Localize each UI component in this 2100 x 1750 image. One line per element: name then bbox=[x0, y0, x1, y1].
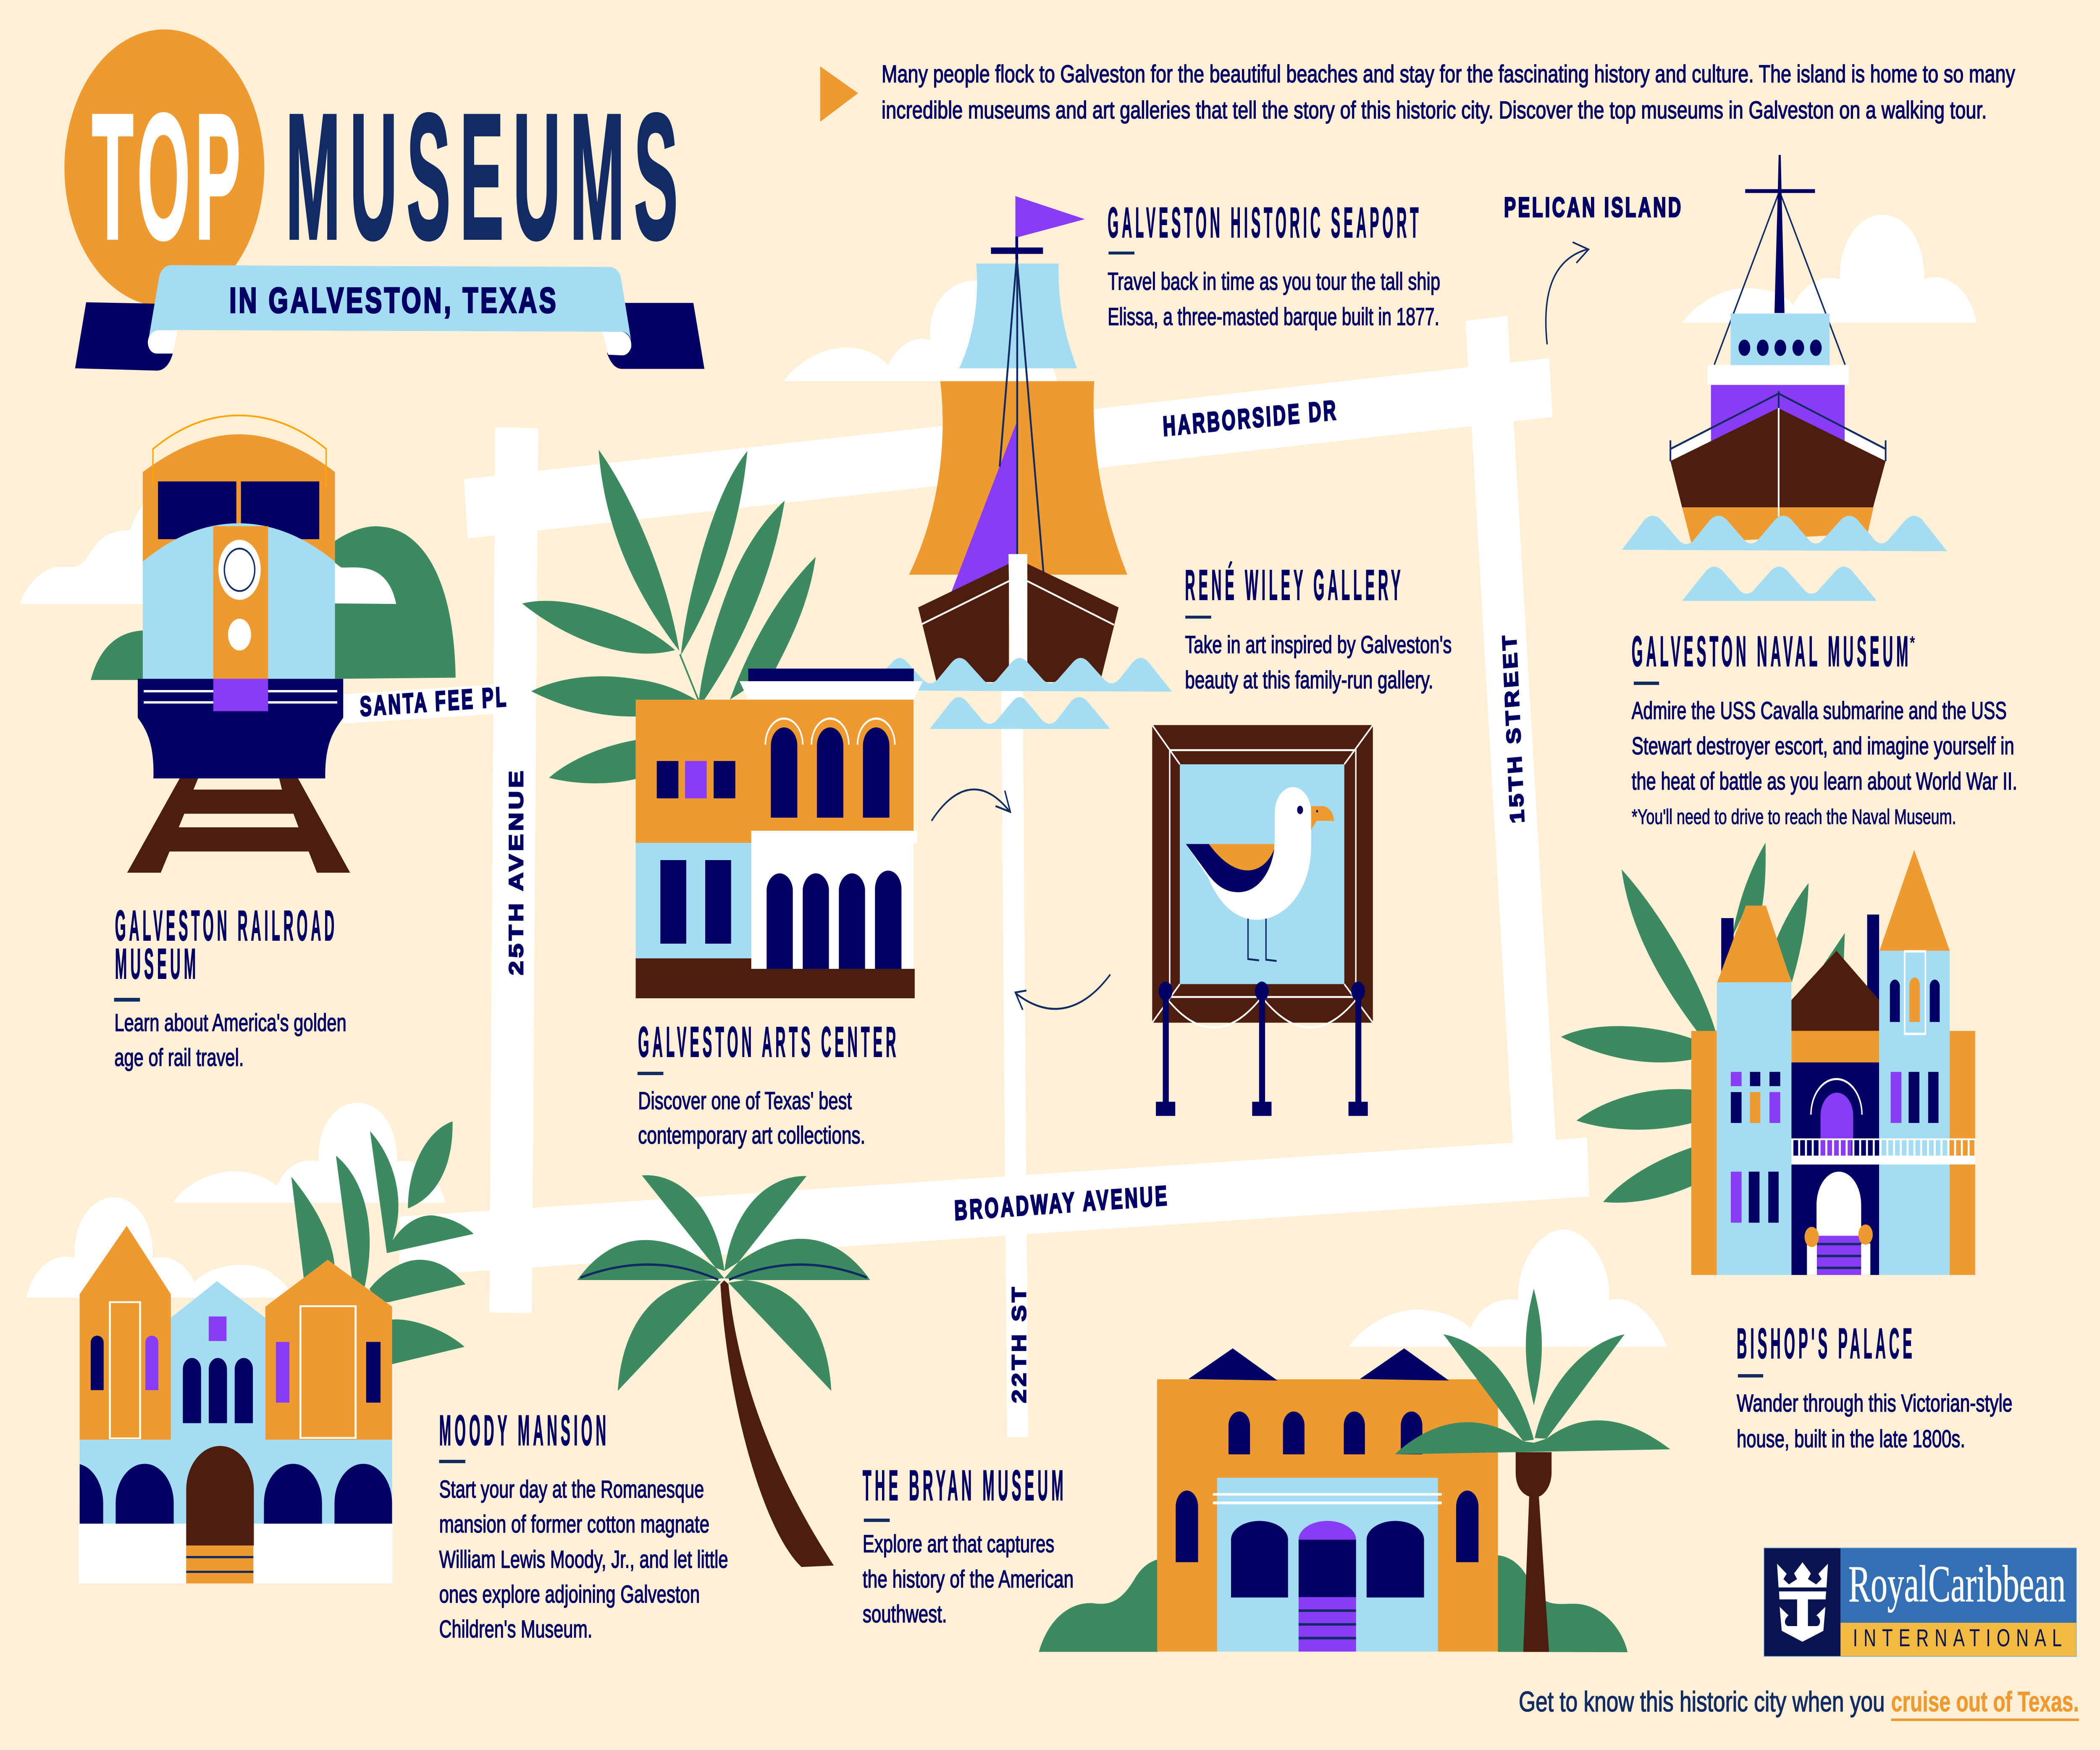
text block: Galveston Arts Center bbox=[638, 1018, 899, 1149]
description line 2: mansion of former cotton magnate bbox=[439, 1510, 709, 1538]
description: Admire the USS Cavalla submarine and the USS bbox=[1632, 697, 2007, 724]
description line 2: age of rail travel. bbox=[114, 1044, 244, 1071]
illustration: Bishop's Palace bbox=[1561, 843, 1975, 1275]
title word: MUSEUMS: MUSEUMS bbox=[286, 76, 687, 277]
description line 5: Children's Museum. bbox=[439, 1615, 592, 1643]
orange sun circle bbox=[64, 29, 264, 307]
title word: TOP: TOP bbox=[92, 76, 245, 277]
road label: Broadway Avenue: BROADWAY AVENUE bbox=[954, 1180, 1170, 1226]
rule bbox=[1185, 616, 1211, 619]
logo wordmark: RoyalCaribbean bbox=[1848, 1556, 2066, 1613]
rule bbox=[1634, 682, 1659, 685]
description: Discover one of Texas' best bbox=[638, 1087, 852, 1115]
description line 4: ones explore adjoining Galveston bbox=[439, 1580, 700, 1608]
text block: The Bryan Museum bbox=[863, 1461, 1074, 1628]
description line 2: Stewart destroyer escort, and imagine yourself in bbox=[1632, 732, 2014, 760]
text: GALVESTON HISTORIC SEAPORT bbox=[1108, 199, 1422, 247]
description: Learn about America's golden bbox=[114, 1009, 346, 1036]
text block: René Wiley Gallery bbox=[1185, 561, 1452, 694]
ribbon subtitle: IN GALVESTON, TEXAS bbox=[229, 281, 558, 320]
text: GALVESTON RAILROAD bbox=[115, 902, 338, 950]
description line 2: the history of the American bbox=[863, 1565, 1074, 1593]
intro line 2: incredible museums and art galleries that tell the story of this historic city. Discover the top museums in Galveston on a walking tour. bbox=[882, 96, 1987, 124]
description line 2: Elissa, a three-masted barque built in 1877. bbox=[1108, 303, 1439, 331]
intro line 1: Many people flock to Galveston for the beautiful beaches and stay for the fascinating history and culture. The island is home to so many bbox=[882, 60, 2016, 88]
link underline bbox=[1891, 1719, 2079, 1721]
description: Explore art that captures bbox=[863, 1530, 1054, 1558]
arrow: to Pelican Island bbox=[1546, 242, 1588, 344]
title block bbox=[64, 29, 704, 371]
illustration: leaning palm tree bbox=[577, 1175, 870, 1567]
intro paragraph bbox=[820, 60, 2016, 124]
logo: Royal Caribbean International bbox=[1764, 1548, 2077, 1657]
description: Wander through this Victorian-style bbox=[1737, 1389, 2012, 1417]
text block: Galveston Historic Seaport bbox=[1108, 199, 1440, 331]
description: Take in art inspired by Galveston's bbox=[1185, 631, 1452, 659]
picture frame bbox=[1152, 725, 1373, 1116]
text block: Galveston Naval Museum bbox=[1632, 627, 2017, 829]
illustration: René Wiley Gallery framed seagull bbox=[932, 725, 1373, 1116]
call to action text: Get to know this historic city when you bbox=[1519, 1685, 1885, 1718]
rule bbox=[439, 1460, 465, 1463]
text: THE BRYAN MUSEUM bbox=[863, 1461, 1067, 1509]
rule bbox=[864, 1519, 890, 1522]
road label: 15th Street: 15TH STREET bbox=[1498, 632, 1529, 824]
logo tagline: INTERNATIONAL bbox=[1853, 1624, 2073, 1652]
description line 2: contemporary art collections. bbox=[638, 1121, 865, 1149]
illustration: Moody Mansion bbox=[26, 1102, 474, 1583]
illustration: Naval Museum ship bbox=[1546, 155, 1976, 601]
ribbon banner bbox=[75, 265, 704, 371]
rule bbox=[638, 1072, 663, 1075]
text block: Galveston Railroad Museum: MUSEUM bbox=[115, 940, 199, 988]
icon: orange arrow bbox=[820, 66, 858, 122]
rule bbox=[1108, 252, 1134, 254]
road label: Harborside Dr: HARBORSIDE DR bbox=[1162, 395, 1339, 442]
description line 3: southwest. bbox=[863, 1600, 947, 1628]
text: GALVESTON ARTS CENTER bbox=[638, 1018, 899, 1066]
description: Travel back in time as you tour the tall ship bbox=[1108, 268, 1440, 295]
description line 2: house, built in the late 1800s. bbox=[1737, 1425, 1965, 1453]
asterisk: * bbox=[1910, 632, 1915, 653]
call to action bbox=[1519, 1685, 2079, 1721]
illustration: tall ship at Historic Seaport bbox=[784, 196, 1172, 729]
road label: 25th Avenue: 25TH AVENUE bbox=[505, 768, 528, 975]
arrow: to gallery bbox=[932, 790, 1010, 821]
illustration: palm leaves and Galveston Arts Center building bbox=[522, 450, 923, 998]
rule bbox=[114, 998, 140, 1002]
illustration: The Bryan Museum building bbox=[1039, 1230, 1670, 1652]
call to action link: cruise out of Texas. bbox=[1891, 1685, 2079, 1718]
text block: Galveston Railroad Museum bbox=[114, 902, 346, 1071]
illustration: Galveston Railroad Museum train bbox=[20, 415, 456, 873]
street map roads bbox=[343, 316, 1589, 1437]
text block: René Wiley Gallery: RENÉ WILEY GALLERY bbox=[1185, 561, 1404, 609]
description line 2: beauty at this family-run gallery. bbox=[1185, 666, 1433, 694]
road labels bbox=[360, 192, 1683, 1403]
text block: Moody Mansion: MOODY MANSION bbox=[439, 1406, 609, 1454]
place label: Pelican Island: PELICAN ISLAND bbox=[1504, 192, 1683, 223]
rule bbox=[1738, 1374, 1763, 1377]
text block: Moody Mansion bbox=[439, 1406, 728, 1643]
road label: 22th St: 22TH ST bbox=[1008, 1284, 1030, 1403]
arrow: back from gallery bbox=[1016, 974, 1110, 1010]
description line 3: the heat of battle as you learn about World War II. bbox=[1632, 767, 2017, 795]
road label: Santa Fee Pl: SANTA FEE PL bbox=[360, 681, 509, 722]
description: Start your day at the Romanesque bbox=[439, 1475, 704, 1503]
description line 3: William Lewis Moody, Jr., and let little bbox=[439, 1545, 728, 1573]
footnote: *You'll need to drive to reach the Naval Museum. bbox=[1632, 805, 1956, 829]
text block: Bishop's Palace bbox=[1737, 1320, 2012, 1453]
